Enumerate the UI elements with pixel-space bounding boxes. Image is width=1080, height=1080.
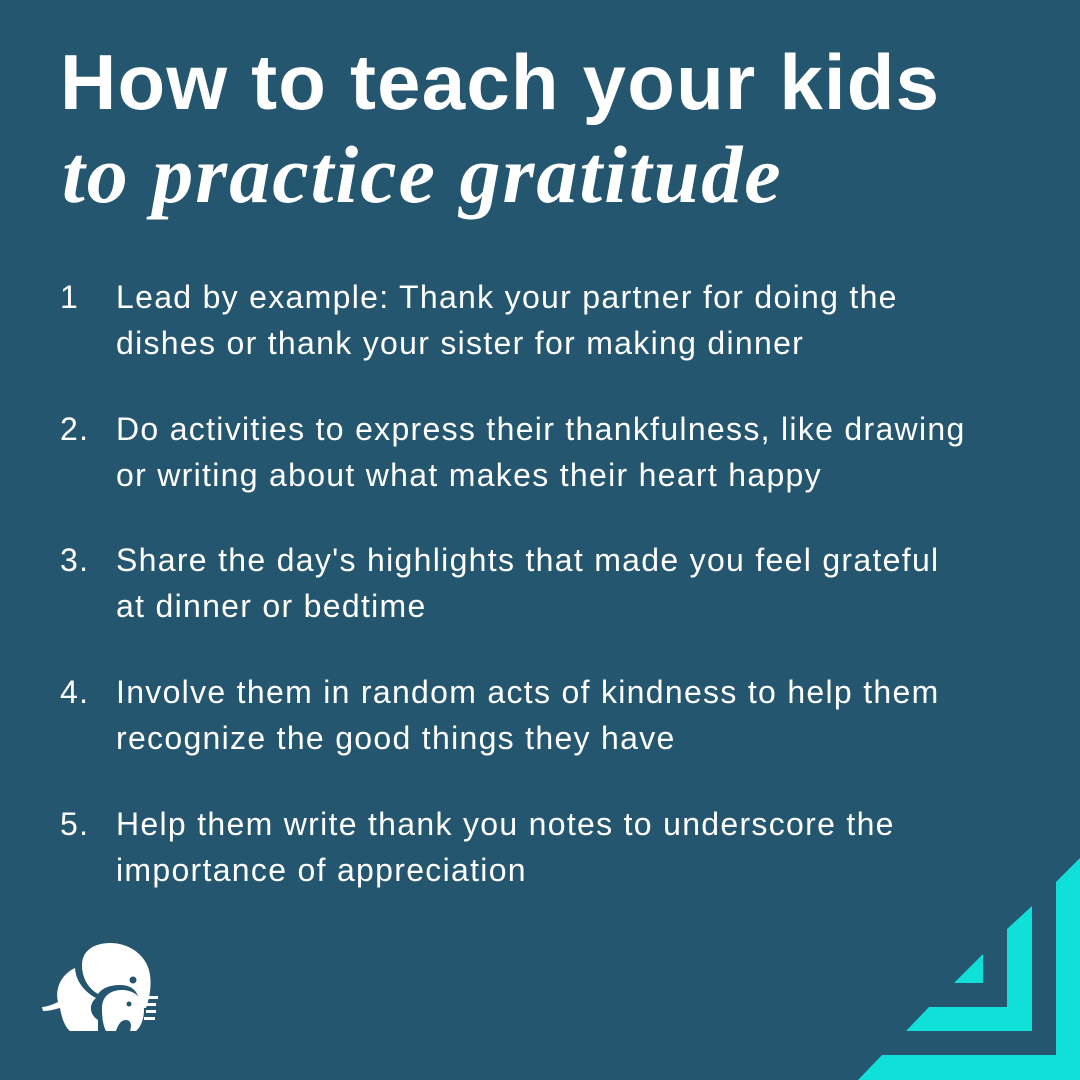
list item 5: importance of appreciation — [116, 852, 527, 888]
list item 5 — [60, 806, 895, 888]
list item 1: 1 — [60, 279, 79, 315]
list item 1 — [60, 279, 898, 361]
list item 3: 3. — [60, 542, 89, 578]
list item 1: Lead by example: Thank your partner for doing the — [116, 279, 898, 315]
list item 5: Help them write thank you notes to underscore the — [116, 806, 895, 842]
list item 1: dishes or thank your sister for making dinner — [116, 325, 804, 361]
list item 4: recognize the good things they have — [116, 720, 676, 756]
title: How to teach your kids — [60, 38, 940, 126]
list item 2 — [60, 411, 966, 493]
list item 2: or writing about what makes their heart happy — [116, 457, 822, 493]
subtitle: to practice gratitude — [62, 129, 783, 220]
list item 4 — [60, 674, 940, 756]
list item 2: Do activities to express their thankfulness, like drawing — [116, 411, 966, 447]
list item 5: 5. — [60, 806, 89, 842]
list item 3: Share the day's highlights that made you feel grateful — [116, 542, 939, 578]
list item 4: Involve them in random acts of kindness to help them — [116, 674, 940, 710]
list item 2: 2. — [60, 411, 89, 447]
list item 3: at dinner or bedtime — [116, 588, 427, 624]
icon: elephant logo — [42, 943, 158, 1031]
list item 4: 4. — [60, 674, 89, 710]
list item 3 — [60, 542, 939, 624]
